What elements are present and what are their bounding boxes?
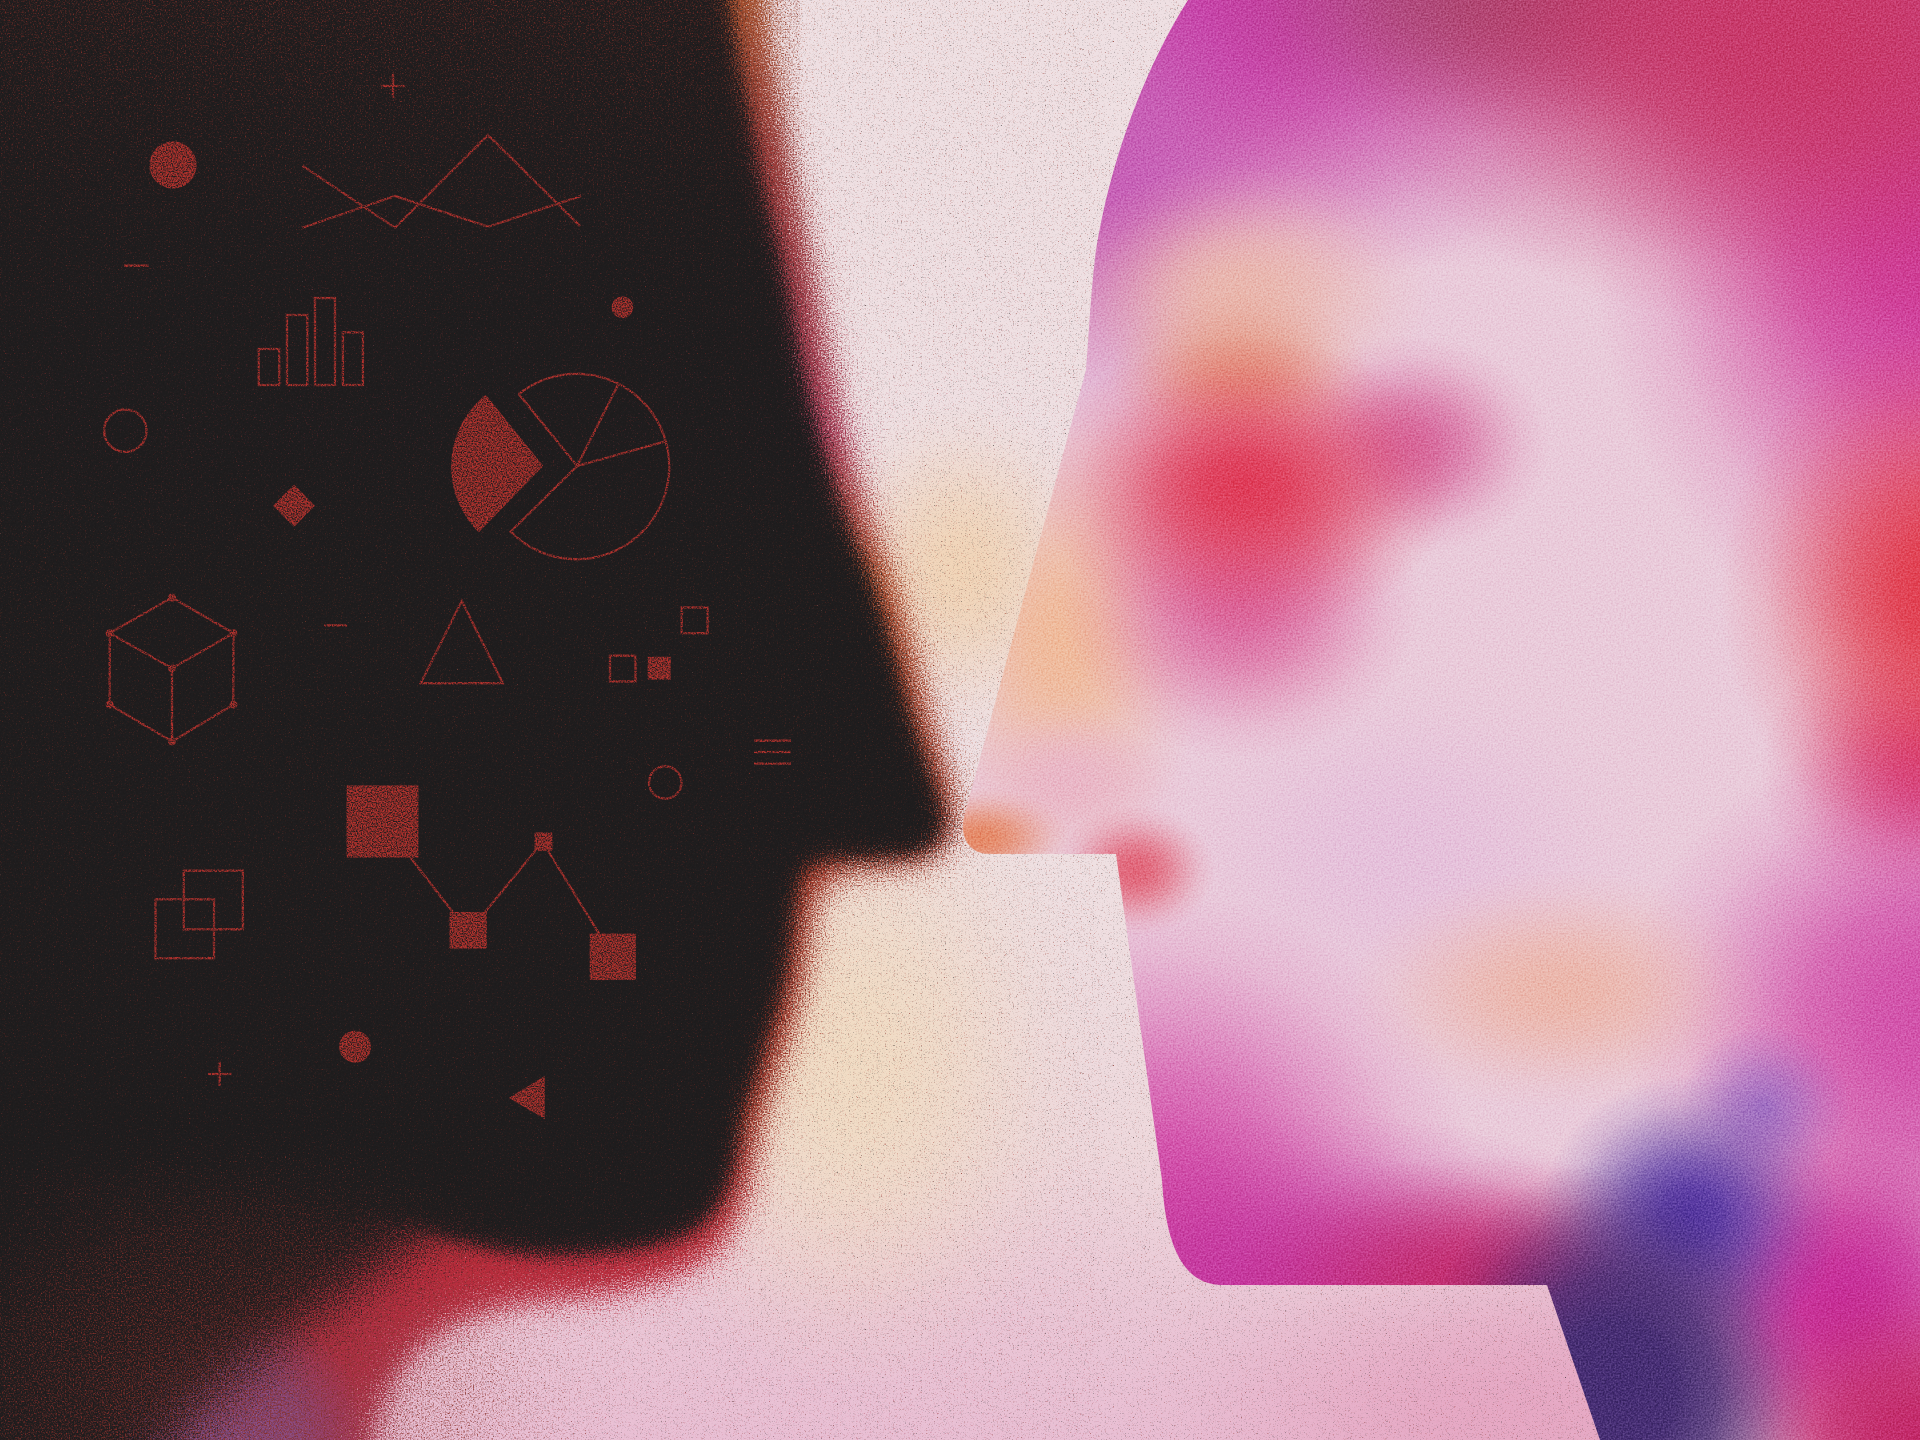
icon: filled triangle	[509, 1076, 545, 1119]
dark profile face	[0, 0, 946, 1256]
icon: plus top	[382, 74, 404, 98]
pale lower centre of the face	[1272, 764, 1721, 1090]
top and right edge blooms	[1073, 0, 1920, 1242]
icon: three lines	[754, 741, 791, 764]
icon: dash left	[124, 265, 149, 267]
icon: filled diamond	[273, 484, 315, 527]
icon: wireframe cube	[106, 594, 237, 745]
line chart	[302, 135, 581, 228]
icon: overlapping squares	[156, 871, 243, 958]
icon: outline circle left	[104, 410, 146, 452]
icon: dash centre	[324, 624, 347, 627]
icon: plus bottom	[208, 1062, 232, 1086]
data icons inside the dark head	[104, 74, 791, 1119]
icon: filled circle bottom	[339, 1031, 371, 1063]
icon: outline circle right	[649, 766, 681, 799]
bar chart	[259, 298, 363, 385]
soft dark tail at lower left	[0, 1120, 480, 1440]
red grain fading from top of face	[0, 0, 800, 340]
light profile head with colour blooms	[960, 0, 1920, 1440]
eye red bloom	[960, 0, 1920, 1440]
forehead and nose peach blooms	[962, 188, 1396, 929]
node chart with squares	[347, 785, 636, 980]
icon: small filled circle	[612, 296, 633, 318]
neck purple bloom	[1449, 1035, 1838, 1440]
stippled red-orange glow around the dark face	[0, 0, 1100, 1440]
head grain	[960, 0, 1920, 1440]
icon: small squares	[610, 608, 708, 681]
pie chart	[451, 374, 669, 559]
icon: outline triangle	[421, 601, 503, 683]
jaw magenta bloom	[1126, 914, 1920, 1440]
icon: filled circle top-left	[150, 142, 196, 188]
red grain over lower left	[0, 1130, 640, 1440]
